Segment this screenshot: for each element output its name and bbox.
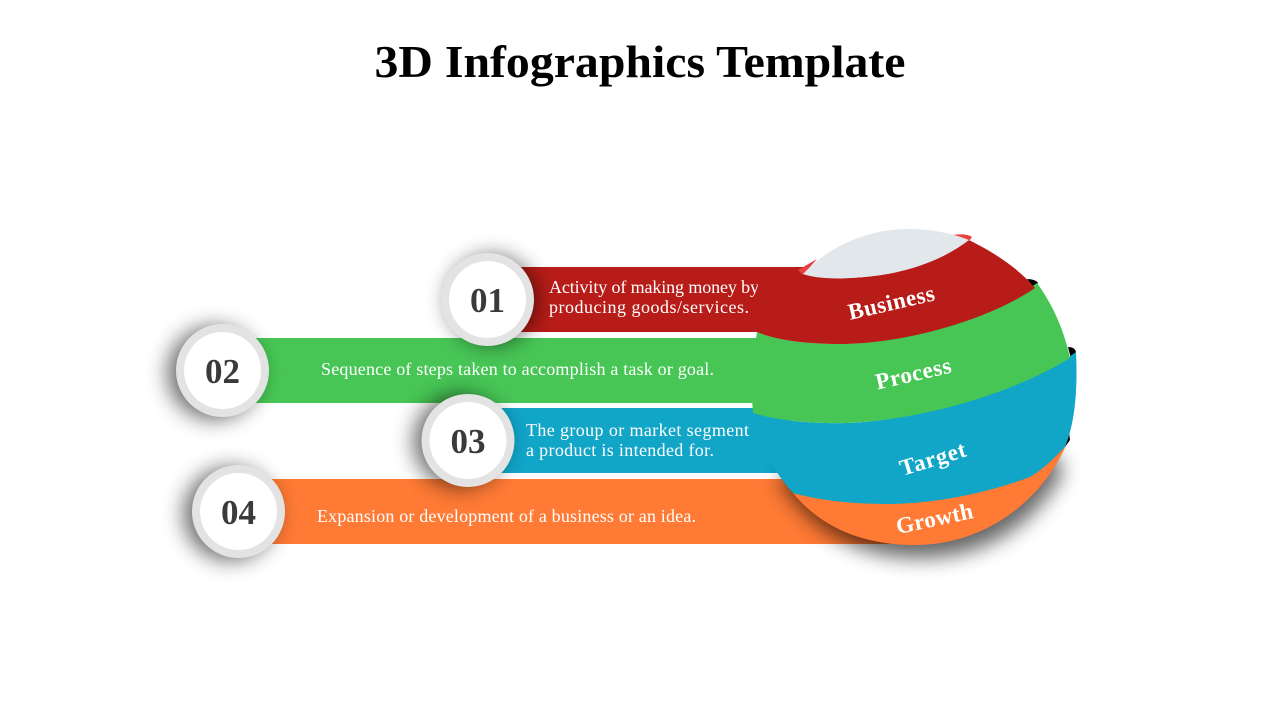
- badge 01: [441, 253, 536, 346]
- bar 01: red: Activity of making money by: [549, 277, 759, 297]
- badge 03: [414, 394, 514, 487]
- title: 3D Infographics Template: [374, 36, 906, 87]
- light red tips: [798, 234, 972, 275]
- segment: green process: [752, 283, 1070, 423]
- segment: blue target: Target: [897, 437, 969, 481]
- badge 01: 01: [470, 281, 505, 320]
- segment: red business: Business: [846, 281, 937, 325]
- bar 01: red: producing goods/services.: [549, 297, 749, 317]
- badge 02: [168, 324, 269, 419]
- sphere shadow: [778, 440, 1064, 558]
- bar 02: green: [250, 338, 770, 403]
- badge 03: 03: [450, 422, 486, 461]
- bar 03: blue: [490, 408, 790, 473]
- bar 03: blue: The group or market segment: [526, 420, 749, 440]
- sphere top cap: [803, 229, 969, 278]
- badge 02: 02: [205, 352, 240, 391]
- segment: red business: [752, 240, 1035, 344]
- sphere: [752, 229, 1077, 558]
- bar 04: orange: [265, 479, 905, 544]
- bar 04: orange: Expansion or development of a business or an idea.: [317, 506, 696, 526]
- segment: orange growth: [793, 438, 1069, 545]
- bar 03: blue: a product is intended for.: [526, 440, 714, 460]
- black fold tips: [1027, 279, 1076, 447]
- badge 04: [184, 465, 285, 560]
- segment: green process: Process: [873, 353, 954, 395]
- badge 04: 04: [221, 493, 256, 532]
- bar 01: red: [500, 267, 820, 332]
- segment: blue target: [753, 352, 1077, 504]
- segment: orange growth: Growth: [894, 498, 975, 539]
- bar 02: green: Sequence of steps taken to accomplish a task or goal.: [321, 359, 714, 379]
